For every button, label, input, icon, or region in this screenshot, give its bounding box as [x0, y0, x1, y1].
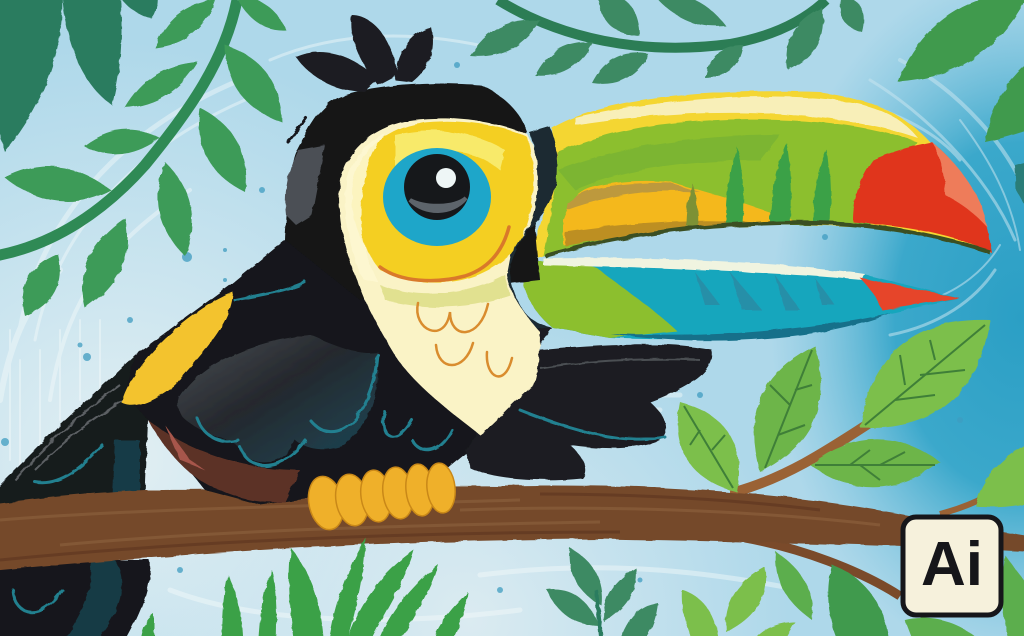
left vine with leaves: [0, 0, 286, 316]
chest scallops: [417, 303, 512, 376]
Ai badge: Ai: [921, 530, 983, 599]
upper beak: [525, 91, 992, 262]
feet: [304, 462, 458, 533]
smile line: [380, 227, 509, 281]
black body and wing: [122, 240, 712, 505]
top vine with leaves: [470, 0, 864, 84]
eye: [383, 148, 491, 246]
black beak base strip: [502, 127, 557, 330]
top right leaves: [898, 0, 1024, 222]
tail: [0, 345, 160, 636]
face and chest: [339, 118, 540, 435]
toucan: [122, 15, 992, 533]
Ai badge: [903, 517, 1001, 615]
twigs and branch: [0, 424, 1024, 596]
bottom foliage: [140, 538, 1024, 636]
lower beak: [522, 258, 960, 341]
head black outline and crest: [285, 15, 540, 300]
right side green leaves: [678, 320, 1024, 507]
